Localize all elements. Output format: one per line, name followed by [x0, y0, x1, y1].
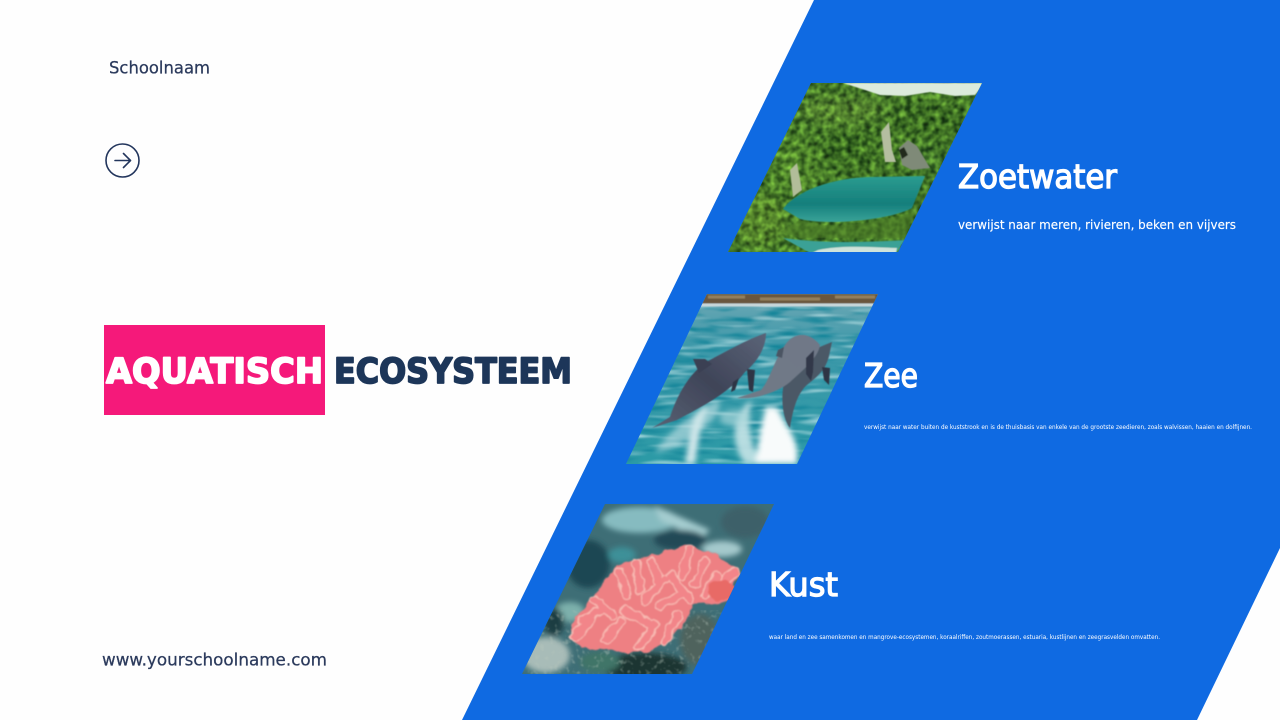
coral [570, 545, 740, 652]
title [104, 325, 572, 415]
section: zoetwater [958, 157, 1236, 232]
water splash [655, 400, 797, 464]
website: www.yourschoolname.com [102, 650, 327, 670]
dolphin three [782, 342, 832, 428]
photo: jumping dolphins [626, 294, 878, 464]
heading: zee: Zee [864, 356, 918, 395]
water texture light [630, 306, 872, 464]
photo: freshwater lake [720, 80, 990, 255]
panel: blue diagonal [462, 0, 1280, 720]
title highlight: aquatisch: AQUATISCH [106, 352, 323, 392]
icon: arrow in circle [106, 144, 139, 177]
description: zoetwater: verwijst naar meren, rivieren, beken en vijvers [958, 217, 1236, 232]
photo: coral reef [522, 504, 774, 674]
title highlight: aquatisch [104, 325, 325, 415]
heading: kust: Kust [769, 565, 838, 604]
description: zee: verwijst naar water buiten de kuststrook en is de thuisbasis van enkele van de grootste zeedieren, zoals walvissen, haaien en dolfijnen. [864, 424, 1252, 431]
dolphin two [737, 335, 820, 398]
title word: ecosysteem: ECOSYSTEEM [334, 352, 572, 392]
rock texture [528, 610, 722, 674]
description: kust: waar land en zee samenkomen en mangrove-ecosystemen, koraalriffen, zoutmoerassen, estuaria, kustlijnen en zeegrasvelden omvatten. [769, 634, 1160, 641]
heading: zoetwater: Zoetwater [958, 157, 1117, 196]
school name: Schoolnaam [109, 58, 210, 78]
water texture dark [628, 306, 872, 464]
section: kust [769, 565, 1160, 641]
dolphin one [652, 333, 766, 428]
section: zee [864, 356, 1252, 431]
forest texture [720, 80, 990, 255]
